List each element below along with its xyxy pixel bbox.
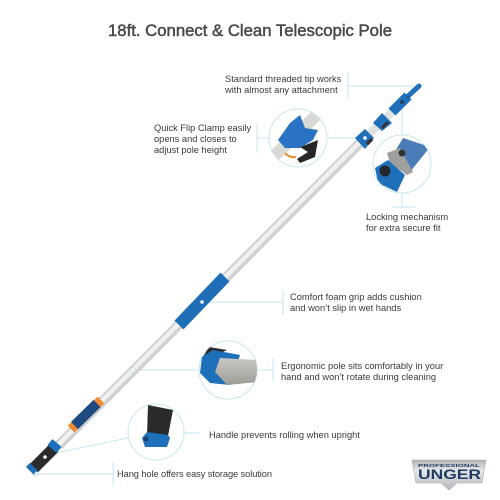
detail circle: ergonomic pole — [199, 341, 257, 399]
lower clamp — [355, 129, 374, 149]
logo: Professional Unger — [412, 460, 486, 490]
pole marker — [131, 368, 135, 372]
callout lines — [37, 73, 415, 486]
label: quick flip clamp: Quick Flip Clamp easily — [154, 123, 251, 133]
label: quick flip clamp: adjust pole height — [154, 145, 227, 155]
label: hang hole: Hang hole offers easy storage solution — [117, 469, 272, 479]
detail circle: locking mechanism — [373, 135, 431, 193]
threaded tip — [392, 86, 419, 112]
logo: Professional Unger: PROFESSIONAL — [418, 463, 480, 468]
logo: Professional Unger: UNGER — [418, 466, 481, 482]
foam grip — [179, 277, 225, 325]
label: locking mechanism: for extra secure fit — [366, 223, 441, 233]
label: threaded tip: with almost any attachment — [224, 85, 338, 95]
label: quick flip clamp: opens and closes to — [154, 134, 237, 144]
detail circle: quick flip clamp — [269, 109, 327, 167]
label: ergonomic pole: Ergonomic pole sits comfortably in your — [281, 361, 443, 371]
detail circle: handle — [128, 404, 184, 460]
label: locking mechanism: Locking mechanism — [366, 212, 448, 222]
label: threaded tip: Standard threaded tip works — [225, 74, 342, 84]
handle collar — [52, 443, 57, 449]
title: 18ft. Connect & Clean Telescopic Pole — [108, 22, 392, 40]
upper clamp — [373, 113, 392, 131]
black handle — [34, 448, 54, 468]
label: ergonomic pole: hand and won’t rotate during cleaning — [281, 372, 436, 382]
label: handle: Handle prevents rolling when upright — [209, 430, 360, 440]
telescopic pole — [30, 86, 419, 476]
label: foam grip: and won’t slip in wet hands — [290, 303, 401, 313]
label: foam grip: Comfort foam grip adds cushion — [290, 292, 422, 302]
pole label — [71, 400, 101, 429]
end cap — [30, 467, 34, 471]
